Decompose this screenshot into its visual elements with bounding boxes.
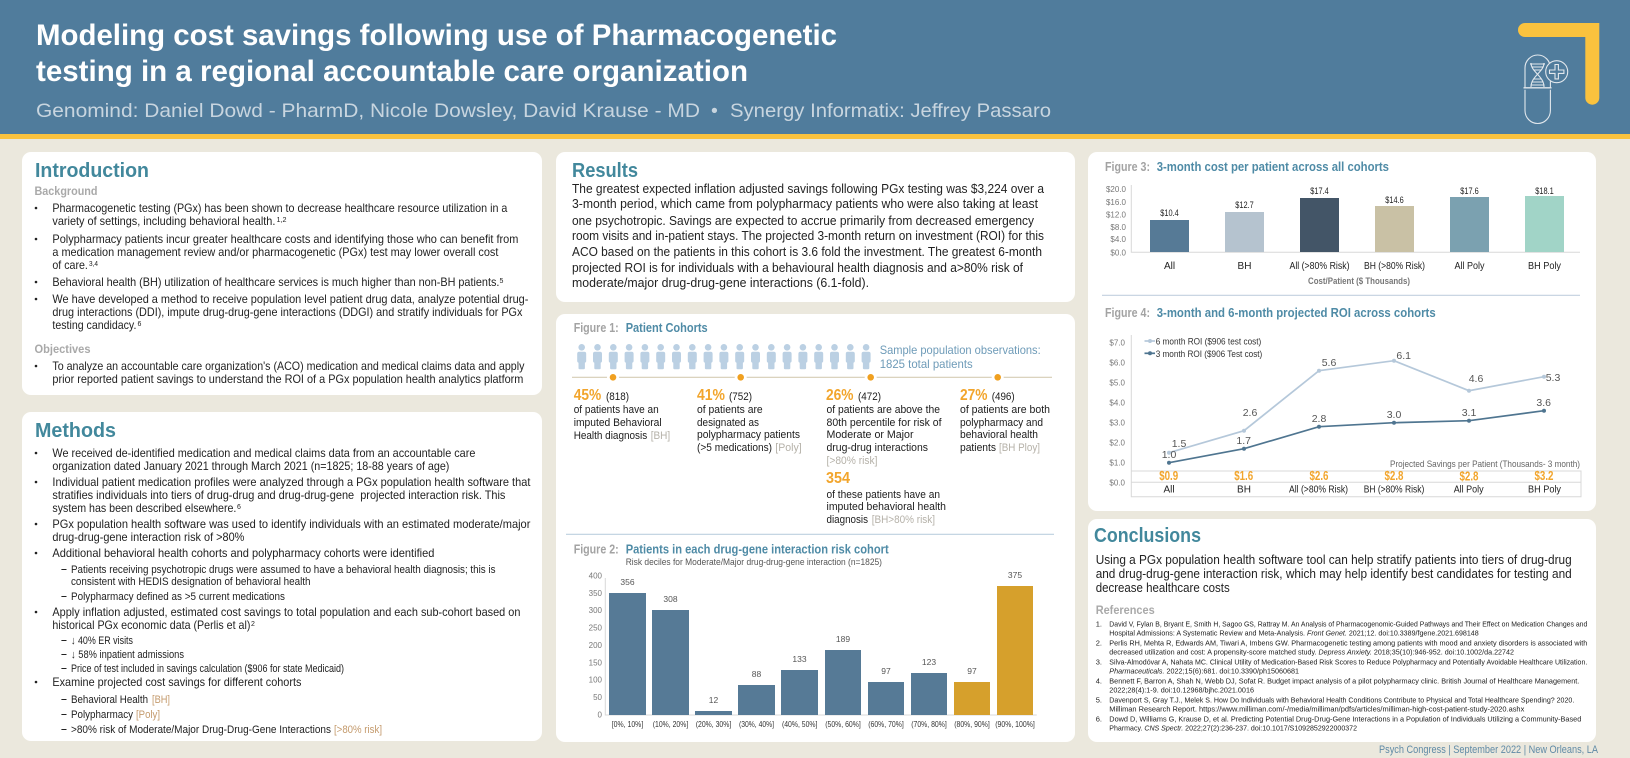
chart: patients per risk decile: (40%, 50%] — [782, 720, 817, 729]
methods bullet list: Behavioral Health — [71, 694, 148, 706]
legend: 6 month ROI ($906 test cost) — [1156, 336, 1261, 348]
chart: patients per risk decile: (30%, 40%] — [739, 720, 774, 729]
cohort: above 80 percent risk: [>80% risk] — [826, 455, 878, 467]
chart: patients per risk decile: 97 — [967, 666, 977, 676]
reference list: David V, Fylan B, Bryant E, Smith H, Sagoo GS, Rattray M. An Analysis of Pharmacogenomic-Guided Pathways and Their Effect on Medication Changes and — [1109, 619, 1587, 628]
chart: patients per risk decile: 400 — [589, 572, 603, 580]
cohort: behavioral health: of patients have an — [574, 404, 659, 416]
authors: Genomind: Daniel Dowd - PharmD, Nicole Dowsley, David Krause - MD — [36, 100, 700, 122]
cohort: behavioral health: 45% — [574, 387, 601, 404]
cohort: polypharmacy and behavioral health: patients — [960, 442, 996, 454]
icon: row of 19 people — [577, 344, 871, 369]
projected savings table: All — [1163, 484, 1175, 496]
chart: projected ROI lines: $5.0 — [1109, 379, 1126, 388]
chart: cost per patient: $16.0 — [1106, 198, 1127, 207]
cohort: polypharmacy and behavioral health: behavioral health — [960, 429, 1038, 441]
ROI data labels: 4.6 — [1469, 373, 1483, 385]
chart: cost per patient: BH — [1238, 261, 1251, 272]
chart: patients per risk decile: (50%, 60%] — [825, 720, 861, 729]
results paragraph: projected ROI is for individuals with a behavioural health diagnosis and a>80% risk of — [572, 260, 1023, 275]
objectives bullet: prior reported patient savings to understand the ROI of a PGx population health analytics platform — [52, 372, 523, 386]
chart: patients per risk decile: 356 — [620, 577, 635, 587]
ROI data labels: 1.5 — [1172, 438, 1186, 450]
methods bullet list: [>80% risk] — [334, 724, 382, 736]
cohort: polypharmacy: (>5 medications) — [697, 442, 772, 454]
projected savings table: All (>80% Risk) — [1289, 484, 1348, 496]
reference list: 4. — [1096, 677, 1102, 686]
legend: 3 month ROI ($906 Test cost) — [1156, 349, 1262, 360]
chart: cost per patient: All Poly — [1454, 261, 1484, 272]
cohort: polypharmacy: designated as — [697, 417, 759, 429]
reference list: Hospital Admissions: A Systematic Review and Meta-Analysis. Front Genet. 2021;12. doi:10.3389/fgene.2021.698148 — [1109, 628, 1479, 637]
projected savings table: BH (>80% Risk) — [1364, 484, 1424, 496]
figure 4 heading: Figure 4: — [1105, 305, 1150, 320]
background bullet list: Polypharmacy patients incur greater healthcare costs and identifying those who can benefit from — [52, 232, 518, 246]
cohort: behavioral health: imputed Behavioral — [574, 417, 662, 429]
objectives bullet: To analyze an accountable care organization's (ACO) medication and medical claims data and apply — [52, 359, 524, 373]
projected savings table: $0.9 — [1159, 469, 1178, 483]
chart: cost per patient: $0.0 — [1110, 248, 1127, 258]
projected savings table — [1159, 459, 1580, 496]
results paragraph: 3-month period, which came from polypharmacy patients who were also taking at least — [572, 196, 1038, 211]
ROI data labels: 1.7 — [1236, 435, 1251, 447]
cohort: polypharmacy and behavioral health: [BH Ploy] — [999, 442, 1040, 454]
chart: cost per patient: BH (>80% Risk) — [1364, 261, 1425, 272]
chart: cost per patient: $20.0 — [1106, 185, 1127, 194]
chart: projected ROI lines: $1.0 — [1109, 459, 1126, 468]
cohort: polypharmacy and behavioral health: of patients are both — [960, 404, 1050, 416]
ROI data labels: 6.1 — [1396, 350, 1411, 362]
cohort: above 80 percent risk: 354 — [826, 470, 850, 487]
reference list: Bennett F, Barron A, Shah N, Webb DJ, Sofat R. Budget impact analysis of a pilot polypharmacy clinic. British Journal of Healthcare Management. — [1109, 677, 1579, 686]
chart: patients per risk decile: 50 — [593, 693, 603, 702]
methods bullet list — [35, 446, 531, 736]
methods bullet list: [BH] — [152, 694, 170, 706]
title — [36, 19, 837, 88]
reference list: Silva-Almodóvar A, Nahata MC. Clinical Utility of Medication-Based Risk Scores to Reduce Polypharmacy and Potentially Avoidable Healthcare Utilization. — [1109, 657, 1587, 666]
figure 1 heading: Figure 1: — [574, 320, 619, 335]
chart: patients per risk decile: (60%, 70%] — [868, 720, 904, 729]
chart: cost per patient: $17.6 — [1460, 186, 1479, 197]
background bullet list: 6 — [138, 321, 142, 328]
chart: patients per risk decile: 350 — [589, 589, 603, 598]
cohort: behavioral health: [BH] — [651, 430, 670, 442]
sample population note: 1825 total patients — [880, 357, 973, 371]
figure 2 heading: Patients in each drug-gene interaction risk cohort — [626, 542, 889, 556]
chart: cost per patient: Cost/Patient ($ Thousands) — [1308, 276, 1410, 286]
heading: methods: Methods — [35, 419, 116, 442]
cohort: above 80 percent risk: [BH>80% risk] — [872, 514, 935, 526]
background bullet list: of care. — [52, 258, 88, 272]
background bullet list: variety of settings, including behavioral health. — [52, 214, 275, 228]
chart: patients per risk decile — [589, 570, 1037, 729]
reference list: 6. — [1096, 714, 1102, 723]
methods bullet list: Polypharmacy defined as >5 current medications — [71, 591, 285, 603]
chart: patients per risk decile: 150 — [589, 658, 603, 668]
results paragraph: one psychotropic. Savings are expected to accrue primarily from decreased emergency — [572, 213, 1034, 228]
panel: introduction — [22, 152, 542, 395]
cohort: polypharmacy — [697, 387, 802, 454]
methods bullet list: drug-drug-gene interaction risk of >80% — [52, 530, 245, 544]
results paragraph: The greatest expected inflation adjusted savings following PGx testing was $3,224 over a — [572, 181, 1045, 196]
reference list: 1. — [1096, 619, 1102, 628]
chart: patients per risk decile: 300 — [589, 606, 603, 615]
cohort: polypharmacy: (752) — [729, 391, 752, 403]
panel: methods — [22, 412, 542, 741]
sample population note — [880, 343, 1041, 371]
methods bullet list: Individual patient medication profiles were analyzed through a PGx population health software that — [52, 475, 531, 489]
chart: projected ROI lines: $4.0 — [1109, 399, 1126, 408]
chart: cost per patient — [1106, 185, 1580, 286]
chart: cost per patient: All — [1164, 261, 1175, 272]
reference list: Dowd D, Williams G, Krause D, et al. Predicting Potential Drug-Drug-Gene Interactions in a Population of Individuals Utilizing a Community-Based — [1109, 714, 1581, 723]
background bullet list: 5 — [500, 278, 504, 285]
chart: cost per patient: $14.6 — [1385, 195, 1404, 206]
results paragraph: room visits and in-patient stays. The projected 3-month return on investment (ROI) for this — [572, 228, 1044, 243]
authors — [36, 100, 1051, 122]
ROI data labels: 2.6 — [1243, 407, 1257, 419]
chart: cost per patient: $12.7 — [1235, 200, 1254, 211]
heading: results: Results — [572, 159, 638, 182]
figure 2 heading — [574, 542, 889, 568]
chart: patients per risk decile: 97 — [881, 666, 891, 676]
background bullet list: 1,2 — [276, 217, 287, 224]
chart: projected ROI lines: $3.0 — [1109, 419, 1126, 428]
methods bullet list: system has been described elsewhere. — [52, 501, 236, 515]
icon: corner bracket — [1525, 30, 1592, 98]
projected savings table: Projected Savings per Patient (Thousands- 3 month) — [1390, 459, 1580, 470]
figure 2 heading: Risk deciles for Moderate/Major drug-drug-gene interaction (n=1825) — [626, 557, 882, 568]
chart: cost per patient: $8.0 — [1110, 223, 1127, 232]
chart: projected ROI lines: $7.0 — [1109, 339, 1126, 348]
chart: patients per risk decile: [0%, 10%] — [612, 720, 643, 729]
methods bullet list: ↓ 40% ER visits — [71, 635, 133, 647]
background bullet list: drug interactions (DDI), impute drug-drug-gene interactions (DDGI) and stratify individuals for PGx — [52, 305, 522, 319]
background bullet list: a medication management review and/or pharmacogenetic (PGx) test may lower overall cost — [52, 245, 499, 259]
figure 3 heading: 3-month cost per patient across all cohorts — [1157, 159, 1389, 174]
figure 2 heading: Figure 2: — [574, 542, 619, 556]
projected savings table: $3.2 — [1534, 469, 1554, 483]
background bullet list — [35, 201, 528, 332]
chart: cost per patient: $18.1 — [1535, 186, 1554, 197]
cohort: behavioral health: (818) — [606, 391, 629, 403]
cohort: polypharmacy and behavioral health: 27% — [960, 387, 988, 404]
chart: projected ROI lines: $0.0 — [1109, 479, 1126, 488]
chart: cost per patient: BH Poly — [1528, 261, 1561, 272]
methods bullet list: 6 — [237, 504, 241, 511]
ROI data labels: 3.6 — [1536, 397, 1551, 409]
chart: cost per patient: $4.0 — [1110, 235, 1127, 244]
chart: patients per risk decile: 88 — [752, 669, 761, 679]
conclusions paragraph: Using a PGx population health software tool can help stratify patients into tiers of drug-drug — [1096, 552, 1572, 567]
chart: patients per risk decile: (90%, 100%] — [995, 720, 1035, 729]
authors: • — [711, 100, 718, 122]
reference list: 5. — [1096, 695, 1102, 704]
projected savings table: $2.8 — [1384, 469, 1404, 483]
projected savings table: $1.6 — [1234, 469, 1253, 483]
cohort: above 80 percent risk: 80th percentile for risk of — [826, 417, 942, 429]
chart: projected ROI lines — [1109, 335, 1581, 497]
figure 3 heading: Figure 3: — [1105, 159, 1150, 174]
subheading: objectives: Objectives — [34, 344, 90, 356]
cohort: above 80 percent risk: of patients are above the — [826, 404, 940, 416]
chart: patients per risk decile: 200 — [589, 641, 603, 650]
ROI data labels: 5.6 — [1322, 357, 1336, 369]
methods bullet list: Polypharmacy — [71, 709, 133, 721]
ROI data labels: 5.3 — [1546, 372, 1560, 384]
cohort: polypharmacy and behavioral health: (496) — [992, 391, 1015, 403]
authors: Synergy Informatix: Jeffrey Passaro — [730, 100, 1051, 122]
chart: patients per risk decile: 0 — [598, 710, 603, 720]
chart: patients per risk decile: 123 — [922, 657, 936, 667]
conclusions paragraph: and drug-drug-gene interaction risk, which may help identify best candidates for testing and — [1096, 566, 1572, 581]
chart: patients per risk decile: 189 — [836, 634, 850, 644]
objectives bullet — [35, 359, 524, 386]
reference list: Perlis RH, Mehta R, Edwards AM, Tiwari A, Imbens GW. Pharmacogenetic testing among patients with mood and anxiety disorders is associated with — [1109, 638, 1587, 647]
timeline with cohort markers — [572, 371, 1052, 383]
background bullet list: We have developed a method to receive population level patient drug data, analyze potential drug- — [52, 292, 528, 306]
methods bullet list: >80% risk of Moderate/Major Drug-Drug-Gene Interactions — [71, 724, 331, 736]
chart: projected ROI lines: $2.0 — [1109, 439, 1126, 448]
results paragraph: ACO based on the patients in this cohort is 3.6 fold the investment. The greatest 6-month — [572, 244, 1042, 259]
chart: cost per patient: $17.4 — [1310, 186, 1329, 197]
ROI data labels: 3.0 — [1387, 409, 1401, 421]
chart: patients per risk decile: (10%, 20%] — [653, 720, 688, 729]
ROI data labels — [1162, 350, 1560, 461]
cohort: polypharmacy: [Poly] — [775, 442, 802, 454]
cohort: above 80 percent risk: Moderate or Major — [826, 429, 914, 441]
background bullet list: 3,4 — [89, 261, 98, 268]
chart: patients per risk decile: 250 — [589, 624, 603, 632]
projected savings table: All Poly — [1454, 484, 1484, 496]
chart: patients per risk decile: (70%, 80%] — [911, 720, 947, 729]
ROI data labels: 1.0 — [1162, 449, 1176, 461]
background bullet list: Behavioral health (BH) utilization of healthcare services is much higher than non-BH patients. — [52, 275, 499, 289]
subheading: background: Background — [34, 186, 98, 198]
chart: patients per risk decile: (20%, 30%] — [696, 720, 731, 729]
panel: results — [556, 152, 1075, 302]
chart: projected ROI lines: $6.0 — [1109, 359, 1126, 368]
legend — [1144, 336, 1262, 360]
background bullet list: Pharmacogenetic testing (PGx) has been shown to decrease healthcare resource utilization in a — [52, 201, 508, 215]
header banner — [0, 0, 1630, 139]
figure 4 heading: 3-month and 6-month projected ROI across cohorts — [1157, 305, 1436, 320]
methods bullet list: organization dated January 2021 through March 2021 (n=1825; 18-88 years of age) — [52, 459, 449, 473]
figure 1 heading: Patient Cohorts — [626, 320, 708, 335]
panel: figures 1 and 2 — [556, 314, 1075, 742]
icon: capsule with DNA and plus — [1524, 55, 1568, 124]
methods bullet list: stratifies individuals into tiers of drug-drug and drug-drug-gene projected interaction risk. This — [52, 488, 505, 502]
cohort: above 80 percent risk: of these patients have an — [826, 489, 940, 501]
methods bullet list: PGx population health software was used to identify individuals with an estimated moderate/major — [52, 517, 530, 531]
chart: patients per risk decile: 12 — [709, 695, 718, 705]
results paragraph: moderate/major drug-drug-gene interactions (6.1-fold). — [572, 275, 869, 290]
background bullet list: testing candidacy. — [52, 318, 136, 332]
cohort: polypharmacy and behavioral health — [960, 387, 1050, 454]
methods bullet list: ↓ 58% inpatient admissions — [71, 649, 184, 661]
methods bullet list: Price of test included in savings calculation ($906 for state Medicaid) — [71, 663, 344, 675]
subheading: references: References — [1096, 605, 1155, 617]
methods bullet list: historical PGx economic data (Perlis et al) — [52, 618, 250, 632]
cohort: polypharmacy: 41% — [697, 387, 725, 404]
reference list: decreased utilization and cost: A propensity-score matched study. Depress Anxiety. 2018;35(10):946-952. doi:10.1002/da.22742 — [1109, 647, 1514, 656]
projected savings table: BH — [1237, 484, 1251, 496]
cohort: behavioral health: Health diagnosis — [574, 430, 648, 442]
methods bullet list: Additional behavioral health cohorts and polypharmacy cohorts were identified — [52, 546, 434, 560]
cohort: polypharmacy: of patients are — [697, 404, 763, 416]
figure 1 heading — [574, 320, 708, 335]
line: 3 month ROI — [1167, 409, 1546, 465]
methods bullet list: consistent with HEDIS designation of behavioral health — [71, 576, 310, 588]
title: testing in a regional accountable care organization — [36, 55, 748, 88]
results paragraph — [572, 181, 1045, 290]
chart: patients per risk decile: 375 — [1008, 570, 1022, 580]
reference list: 3. — [1096, 657, 1102, 666]
projected savings table: BH Poly — [1528, 484, 1561, 496]
chart: patients per risk decile: 133 — [792, 654, 807, 664]
cohort: above 80 percent risk: diagnosis — [826, 514, 868, 526]
chart: cost per patient: $10.4 — [1160, 208, 1179, 219]
panel: conclusions — [1088, 519, 1596, 742]
cohort: above 80 percent risk: (472) — [858, 391, 881, 403]
ROI data labels: 2.8 — [1312, 413, 1326, 425]
reference list: Pharmaceuticals. 2022;15(6):681. doi:10.3390/ph15060681 — [1109, 666, 1299, 675]
reference list: Pharmacy. CNS Spectr. 2022;27(2):236-237. doi:10.1017/S1092852922000372 — [1109, 723, 1357, 732]
heading: conclusions: Conclusions — [1094, 524, 1201, 547]
line: 6 month ROI — [1167, 359, 1546, 455]
projected savings table: $2.8 — [1460, 470, 1479, 484]
cohort: above 80 percent risk: imputed behavioral health — [826, 501, 946, 513]
methods bullet list: We received de-identified medication and medical claims data from an accountable care — [52, 446, 476, 460]
projected savings table: $2.6 — [1310, 469, 1329, 483]
conclusions paragraph — [1096, 552, 1572, 595]
reference list: 2. — [1096, 638, 1102, 647]
cohort: above 80 percent risk: drug-drug interactions — [826, 442, 928, 454]
conclusions paragraph: decrease healthcare costs — [1096, 580, 1230, 595]
reference list: Davenport S, Gray T.J., Melek S. How Do Individuals with Behavioral Health Conditions Contribute to Physical and Total Healthcare Spending? 2020. — [1109, 695, 1574, 704]
reference list: 2022;28(4):1-9. doi:10.12968/bjhc.2021.0016 — [1109, 686, 1254, 695]
cohort: above 80 percent risk: 26% — [826, 387, 854, 404]
chart: patients per risk decile: 308 — [663, 594, 678, 604]
sample population note: Sample population observations: — [880, 343, 1041, 357]
cohort: polypharmacy: polypharmacy patients — [697, 429, 800, 441]
reference list: Milliman Research Report. https://www.milliman.com/-/media/milliman/pdfs/articles/milliman-high-cost-patient-study-2020.ashx — [1109, 704, 1525, 713]
title: Modeling cost savings following use of Pharmacogenetic — [36, 19, 837, 52]
methods bullet list: Patients receiving psychotropic drugs were assumed to have a behavioral health diagnosis; this is — [71, 564, 496, 576]
cohort: polypharmacy and behavioral health: polypharmacy and — [960, 417, 1043, 429]
methods bullet list: Apply inflation adjusted, estimated cost savings to total population and each sub-cohort based on — [52, 605, 520, 619]
reference list — [1096, 619, 1587, 732]
chart: patients per risk decile: 100 — [589, 676, 603, 684]
heading: introduction: Introduction — [35, 159, 149, 182]
methods bullet list: Examine projected cost savings for different cohorts — [52, 675, 301, 689]
ROI data labels: 3.1 — [1462, 407, 1476, 419]
chart: cost per patient: All (>80% Risk) — [1290, 261, 1350, 272]
cohort: behavioral health — [574, 387, 670, 442]
methods bullet list: [Poly] — [136, 709, 160, 721]
methods bullet list: 2 — [251, 621, 255, 628]
cohort: above 80 percent risk — [826, 387, 946, 526]
panel: figures 3 and 4 — [1088, 152, 1596, 511]
chart: cost per patient: $12.0 — [1106, 210, 1127, 220]
chart: patients per risk decile: (80%, 90%] — [954, 720, 990, 729]
